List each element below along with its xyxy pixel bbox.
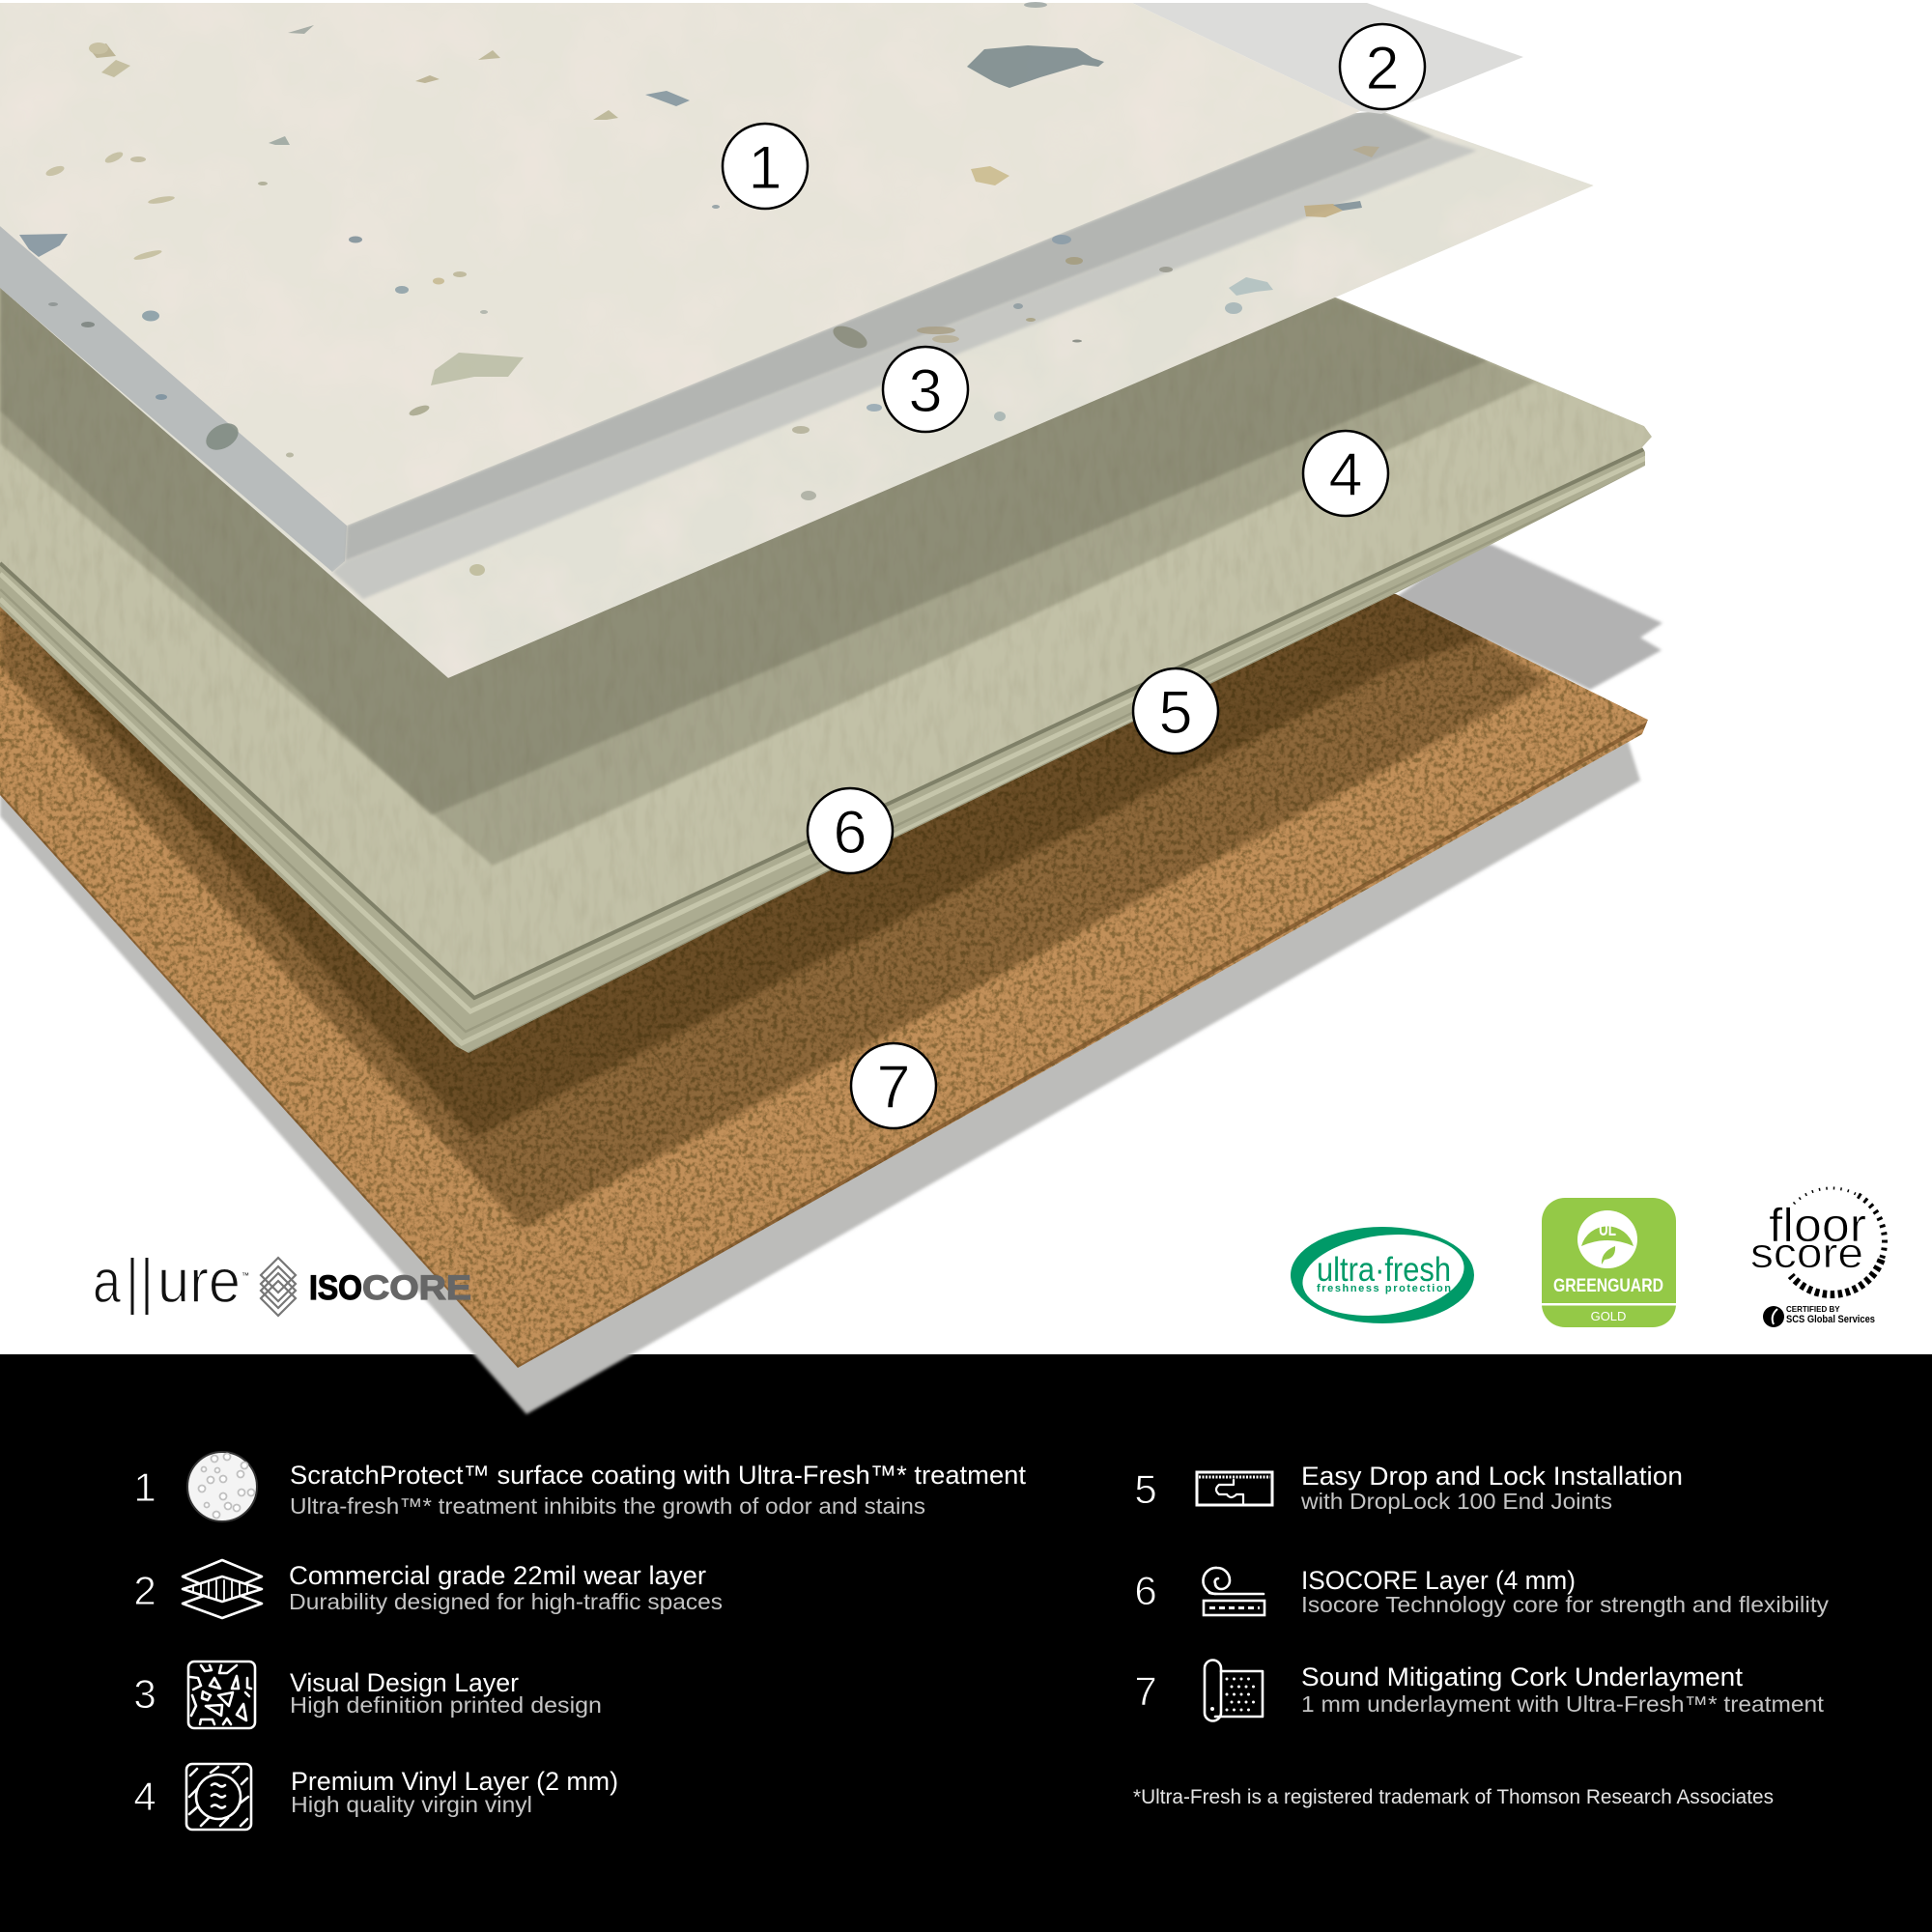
logo: allure isocore: a — [93, 1246, 121, 1316]
legend item 6: 6 — [1134, 1568, 1157, 1613]
panel: black legend band — [0, 1354, 1932, 1932]
callout 2: 2 — [1365, 35, 1400, 102]
legend item 5 — [1134, 1462, 1683, 1514]
legend item 7: Sound Mitigating Cork Underlayment — [1301, 1662, 1744, 1691]
layer 1: scratch protect surface — [0, 3, 1360, 526]
badge: greenguard gold: UL — [1599, 1220, 1616, 1240]
badge: ultra-fresh — [1291, 1226, 1474, 1324]
icon: bubbles circle — [187, 1452, 257, 1521]
badge: greenguard gold — [1542, 1198, 1676, 1327]
legend item 3: Visual Design Layer — [290, 1668, 519, 1697]
legend item 5: Easy Drop and Lock Installation — [1301, 1462, 1683, 1491]
badge: floorscore: floor — [1769, 1200, 1866, 1252]
layer stack illustration — [0, 2, 1662, 1414]
callout 6 — [808, 788, 893, 873]
callout 5 — [1133, 668, 1218, 753]
logo: allure isocore: CORE — [362, 1269, 471, 1307]
callout 1 — [723, 124, 808, 209]
callout 4 — [1303, 431, 1388, 516]
legend item 4: High quality virgin vinyl — [291, 1792, 532, 1817]
icon: vinyl circle — [186, 1764, 251, 1830]
legend item 2: Commercial grade 22mil wear layer — [289, 1561, 706, 1590]
badge: floorscore — [1750, 1188, 1885, 1327]
icon: drop and lock joint — [1197, 1472, 1272, 1505]
layer 2: wear layer — [1132, 3, 1523, 114]
layer 7: cork underlayment — [0, 541, 1648, 1368]
badge: floorscore: score — [1750, 1230, 1863, 1277]
legend item 4: Premium Vinyl Layer (2 mm) — [291, 1767, 618, 1796]
legend item 6 — [1134, 1566, 1830, 1617]
callout 1: 1 — [748, 134, 782, 202]
logo: allure isocore — [93, 1246, 471, 1316]
callout 7: 7 — [876, 1054, 911, 1122]
footnote: *Ultra-Fresh is a registered trademark of Thomson Research Associates — [1133, 1786, 1774, 1808]
callout 2 — [1340, 24, 1425, 109]
logo: allure isocore: ure — [157, 1246, 241, 1316]
badge: ultra-fresh: ultra·fresh — [1317, 1251, 1451, 1289]
legend item 1: ScratchProtect™ surface coating with Ultra-Fresh™* treatment — [290, 1461, 1026, 1490]
legend item 3: High definition printed design — [290, 1692, 602, 1718]
logo: allure isocore: ™ — [242, 1271, 249, 1280]
icon: cork underlayment roll — [1205, 1660, 1263, 1721]
legend item 7 — [1134, 1660, 1825, 1721]
badge: floorscore: SCS Global Services — [1786, 1314, 1875, 1325]
layers 4-6: vinyl and isocore plank — [0, 270, 1652, 1055]
legend item 4: 4 — [133, 1774, 156, 1819]
legend item 1: Ultra-fresh™* treatment inhibits the growth of odor and stains — [290, 1493, 925, 1519]
legend item 1: 1 — [133, 1464, 156, 1510]
callout 3: 3 — [908, 357, 943, 425]
callout 6: 6 — [833, 799, 867, 867]
legend item 3: 3 — [133, 1671, 156, 1717]
layer 3: visual design layer — [0, 111, 1594, 678]
callout 3 — [883, 347, 968, 432]
callout 5: 5 — [1158, 679, 1193, 747]
cast shadows under cork — [0, 539, 1662, 1414]
legend item 7: 1 mm underlayment with Ultra-Fresh™* treatment — [1301, 1691, 1825, 1717]
logo: allure isocore: ISO — [309, 1269, 362, 1307]
legend item 4 — [133, 1764, 618, 1830]
legend item 1 — [133, 1452, 1026, 1521]
legend item 3 — [133, 1662, 602, 1728]
legend item 6: ISOCORE Layer (4 mm) — [1301, 1566, 1576, 1595]
badge: ultra-fresh: freshness protection — [1317, 1283, 1451, 1294]
callout 7 — [851, 1043, 936, 1128]
icon: design fragments — [188, 1662, 255, 1728]
legend item 2: Durability designed for high-traffic spaces — [289, 1589, 723, 1614]
badge: greenguard gold: GREENGUARD — [1553, 1276, 1663, 1296]
legend item 2 — [133, 1560, 723, 1618]
badge: floorscore: CERTIFIED BY — [1786, 1305, 1840, 1314]
icon: isocore roll — [1203, 1568, 1264, 1615]
legend item 2: 2 — [133, 1568, 156, 1613]
terrazzo flakes on surface layers — [19, 2, 1379, 576]
callout 4: 4 — [1328, 441, 1363, 509]
badge: greenguard gold: GOLD — [1591, 1309, 1626, 1323]
legend item 5: 5 — [1134, 1466, 1157, 1512]
legend item 6: Isocore Technology core for strength and flexibility — [1301, 1592, 1830, 1617]
icon: stacked wear layers — [183, 1560, 262, 1618]
legend item 7: 7 — [1134, 1668, 1157, 1714]
legend item 5: with DropLock 100 End Joints — [1300, 1489, 1612, 1514]
